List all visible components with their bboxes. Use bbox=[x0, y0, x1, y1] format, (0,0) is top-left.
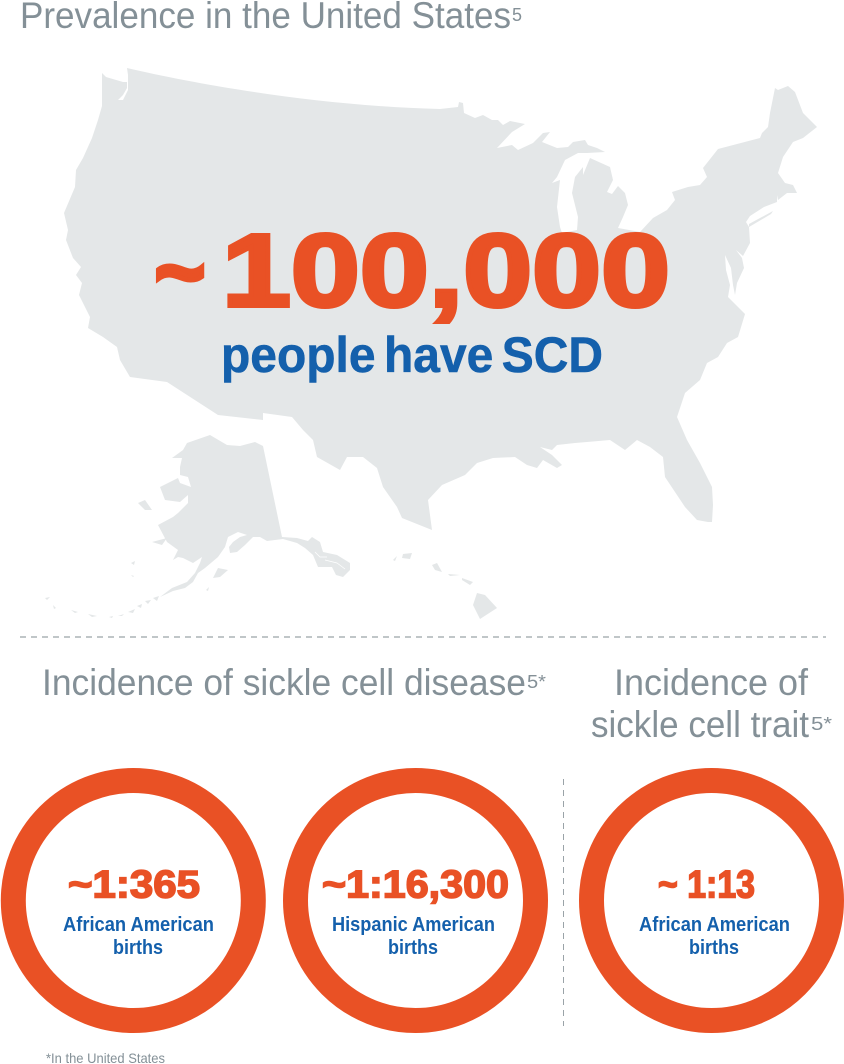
heading: incidence of sickle cell disease: Incidence of sickle cell disease bbox=[42, 662, 526, 703]
stat ring: African American births, disease: African American bbox=[63, 914, 214, 936]
prevalence figure: about 100,000: 100,000 bbox=[222, 213, 670, 328]
stat ring: Hispanic American births: ~1:16,300 bbox=[322, 864, 509, 906]
title: 5 bbox=[512, 5, 522, 25]
stat ring: Hispanic American births: births bbox=[388, 937, 438, 959]
heading: incidence of sickle cell disease: 5* bbox=[527, 672, 546, 692]
stat ring: African American births, trait: births bbox=[689, 937, 739, 959]
prevalence figure: about 100,000: ~ bbox=[155, 222, 205, 321]
stat ring: African American births, trait: ~ 1:13 bbox=[658, 864, 755, 906]
heading: incidence of sickle cell trait: 5* bbox=[811, 714, 832, 734]
stat ring: African American births, trait bbox=[592, 780, 832, 1020]
heading: incidence of sickle cell trait: sickle cell trait bbox=[591, 704, 810, 745]
stat ring: African American births, trait: African American bbox=[639, 914, 790, 936]
map of the United States bbox=[45, 68, 817, 619]
caption: people have SCD: people have SCD bbox=[221, 327, 603, 383]
stat ring: African American births, disease: births bbox=[113, 937, 163, 959]
stat ring: African American births, disease bbox=[13, 780, 253, 1020]
stat ring: Hispanic American births: Hispanic American bbox=[332, 914, 495, 936]
stat ring: Hispanic American births bbox=[296, 780, 536, 1020]
heading: incidence of sickle cell trait: Incidence of bbox=[614, 662, 809, 703]
heading: incidence of sickle cell trait bbox=[591, 662, 832, 745]
stat ring: African American births, disease: ~1:365 bbox=[68, 864, 200, 906]
